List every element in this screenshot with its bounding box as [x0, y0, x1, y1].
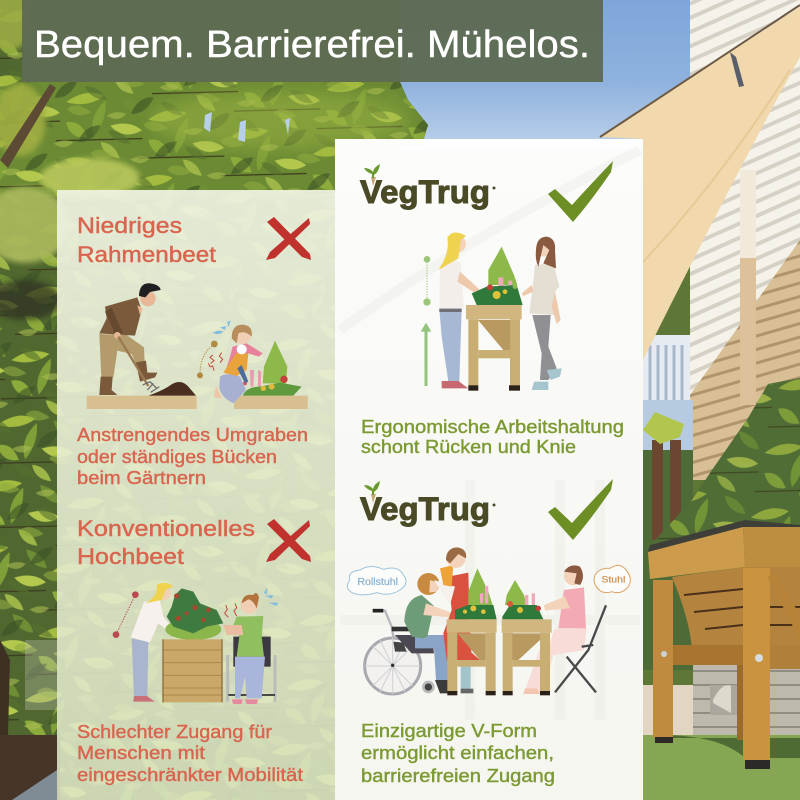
logo: VegTrug bottom: VegTrug	[360, 491, 490, 527]
cloud label Stuhl	[594, 565, 630, 593]
text: access problem	[77, 722, 303, 785]
heading: Konventionelles Hochbeet: Hochbeet	[77, 544, 185, 569]
text: ergonomic benefit: schont Rücken und Knie	[361, 437, 576, 457]
wheelchair	[365, 638, 421, 694]
sail	[600, 7, 800, 360]
text: V-shape benefit: Einzigartige V-Form	[361, 721, 537, 741]
heading: Niedriges Rahmenbeet: Niedriges	[77, 213, 182, 238]
wheelchair person	[415, 635, 449, 680]
icon: red cross 1	[266, 217, 311, 260]
far posts and plants	[643, 400, 693, 670]
height guide	[425, 259, 428, 302]
icon: green check 2	[548, 479, 613, 540]
text: V-shape benefit: barrierefreien Zugang	[361, 766, 555, 786]
tree branch	[0, 84, 56, 168]
icon: green check 1	[548, 161, 613, 222]
VegTrug table	[466, 305, 522, 319]
beds	[87, 396, 197, 409]
heading: Niedriges Rahmenbeet: Rahmenbeet	[77, 242, 217, 267]
text: ergonomic benefit: Ergonomische Arbeitshaltung	[361, 417, 624, 437]
wood crate	[162, 639, 223, 702]
sail clip	[730, 52, 744, 87]
VegTrug tables	[447, 619, 497, 633]
standing woman	[461, 662, 471, 690]
illustration: wheelchair user, standing woman and seated woman at VegTrug	[347, 547, 630, 695]
flowers and shrub	[263, 341, 287, 383]
icon: red cross 2	[266, 519, 311, 562]
text: V-shape benefit	[361, 721, 555, 786]
illustration: low raised bed, digging man and bending woman	[87, 283, 308, 409]
panel: right VegTrug background	[335, 139, 643, 800]
foliage background	[0, 0, 440, 800]
text: digging problem: beim Gärtnern	[77, 468, 206, 488]
strain marks	[225, 603, 237, 617]
text: ergonomic benefit	[361, 417, 624, 457]
sky	[400, 0, 700, 150]
logo: VegTrug top: VegTrug	[360, 174, 490, 210]
sweat	[213, 321, 231, 334]
soil	[148, 382, 196, 396]
left woman	[439, 309, 462, 382]
wooden planter	[648, 520, 800, 769]
tomato plant	[165, 619, 221, 640]
standing woman	[132, 638, 148, 697]
house siding upper	[690, 0, 800, 400]
title: Bequem. Barrierefrei. Mühelos.	[34, 24, 590, 66]
plants	[468, 568, 493, 605]
text: digging problem: oder ständiges Bücken	[77, 447, 277, 467]
wheelchair woman	[235, 657, 265, 698]
far house	[643, 335, 690, 435]
title banner	[22, 0, 603, 82]
text: digging problem	[77, 425, 308, 488]
strain marks	[208, 353, 223, 371]
plants	[488, 247, 517, 285]
grey wall	[693, 665, 800, 745]
cloud label Stuhl: Stuhl	[601, 574, 625, 584]
chair	[555, 605, 606, 692]
text: access problem: Schlechter Zugang für	[77, 722, 272, 742]
wheelchair	[233, 637, 271, 667]
cloud label Rollstuhl: Rollstuhl	[357, 577, 398, 588]
illustration: ergonomic posture at VegTrug	[421, 232, 562, 391]
right woman	[532, 315, 557, 380]
posture indicator	[116, 595, 135, 635]
panel: left comparison background	[57, 190, 335, 800]
seated woman	[524, 628, 587, 693]
text: access problem: Menschen mit	[77, 743, 205, 763]
woman	[219, 374, 246, 403]
cloud label Rollstuhl	[347, 566, 406, 595]
heading: Konventionelles Hochbeet: Konventionelles	[77, 516, 255, 541]
heading: Niedriges Rahmenbeet	[77, 213, 217, 267]
heading: Konventionelles Hochbeet	[77, 516, 255, 569]
sweat	[264, 587, 278, 606]
illustration: conventional raised bed with standing woman and wheelchair user	[113, 583, 278, 704]
house siding tan	[690, 240, 800, 480]
man	[99, 334, 145, 377]
text: V-shape benefit: ermöglicht einfachen,	[361, 743, 554, 763]
planter plants	[656, 378, 800, 540]
pole	[740, 170, 756, 405]
grass	[643, 735, 800, 800]
text: digging problem: Anstrengendes Umgraben	[77, 425, 308, 445]
text: access problem: eingeschränkter Mobilität	[77, 765, 303, 785]
